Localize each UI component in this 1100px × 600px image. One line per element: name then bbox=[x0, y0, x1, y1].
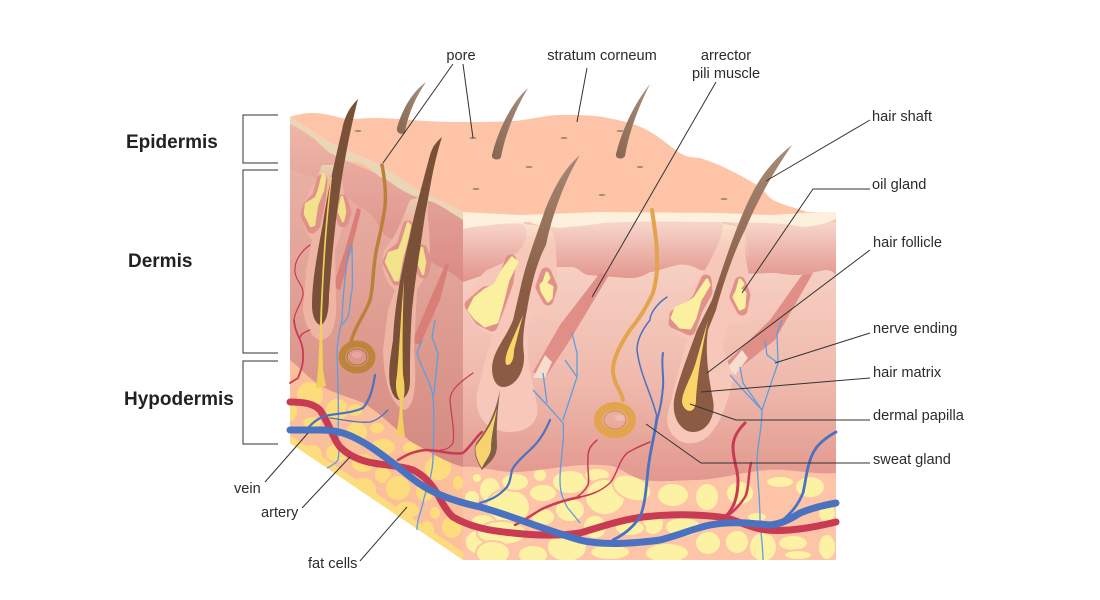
label: vein: vein bbox=[234, 481, 261, 497]
pores bbox=[354, 130, 728, 200]
follicle right bbox=[667, 222, 754, 443]
upper dermis right bbox=[463, 222, 836, 282]
label lines bbox=[265, 64, 870, 561]
cream epidermis band right bbox=[463, 211, 836, 229]
follicle left 2 bbox=[382, 195, 430, 410]
bracket: dermis bbox=[243, 170, 278, 353]
label: pore: pore bbox=[446, 48, 476, 64]
new hair germ bbox=[475, 390, 500, 470]
sweat gland right bbox=[598, 210, 657, 434]
vein main bbox=[290, 430, 836, 543]
panel: left face of skin block bbox=[282, 117, 464, 560]
label: stratum corneum: stratum corneum bbox=[547, 48, 657, 64]
dermis left bbox=[290, 150, 463, 467]
heading: Dermis: Dermis bbox=[128, 251, 192, 272]
blood vessels bbox=[290, 245, 836, 543]
bracket: epidermis bbox=[243, 115, 278, 163]
hair root left 1 bbox=[312, 99, 358, 388]
oil glands bbox=[305, 174, 745, 330]
label: hair follicle: hair follicle bbox=[873, 235, 942, 251]
fat cells left bbox=[282, 381, 464, 540]
label: hair shaft: hair shaft bbox=[872, 109, 932, 125]
arrector pili muscles bbox=[333, 208, 813, 378]
heading: Hypodermis: Hypodermis bbox=[124, 389, 234, 410]
hair root centre bbox=[492, 155, 580, 387]
label: dermal papilla: dermal papilla bbox=[873, 408, 965, 424]
bracket: hypodermis bbox=[243, 361, 278, 444]
hair root left 2 bbox=[389, 137, 442, 436]
thin arteries bbox=[290, 245, 751, 525]
label: nerve ending: nerve ending bbox=[873, 321, 957, 337]
label: hair matrix: hair matrix bbox=[873, 365, 942, 381]
thin veins bbox=[308, 297, 836, 540]
heading: Epidermis: Epidermis bbox=[126, 132, 218, 153]
hair follicle sheaths bbox=[302, 165, 754, 443]
label: arrector pili muscle: arrector bbox=[701, 48, 751, 64]
funnels near surface bbox=[516, 224, 555, 254]
dermis right bbox=[463, 265, 836, 481]
label: artery: artery bbox=[261, 505, 299, 521]
follicle left 1 bbox=[302, 165, 345, 340]
panel: right face of skin block bbox=[463, 211, 836, 565]
label: fat cells: fat cells bbox=[308, 556, 357, 572]
follicle centre bbox=[466, 222, 558, 432]
upper dermis left bbox=[290, 123, 463, 282]
label: arrector pili muscle: pili muscle bbox=[692, 66, 760, 82]
hair root right bbox=[674, 145, 792, 432]
nerves bbox=[327, 245, 782, 560]
label: sweat gland: sweat gland bbox=[873, 452, 951, 468]
fat cells right bbox=[464, 468, 836, 565]
label: oil gland: oil gland bbox=[872, 177, 926, 193]
panel: skin surface bbox=[290, 113, 807, 212]
sweat gland left bbox=[342, 165, 385, 370]
surface hair shafts bbox=[397, 82, 650, 159]
artery main bbox=[290, 402, 836, 535]
cream band left bbox=[290, 117, 463, 220]
